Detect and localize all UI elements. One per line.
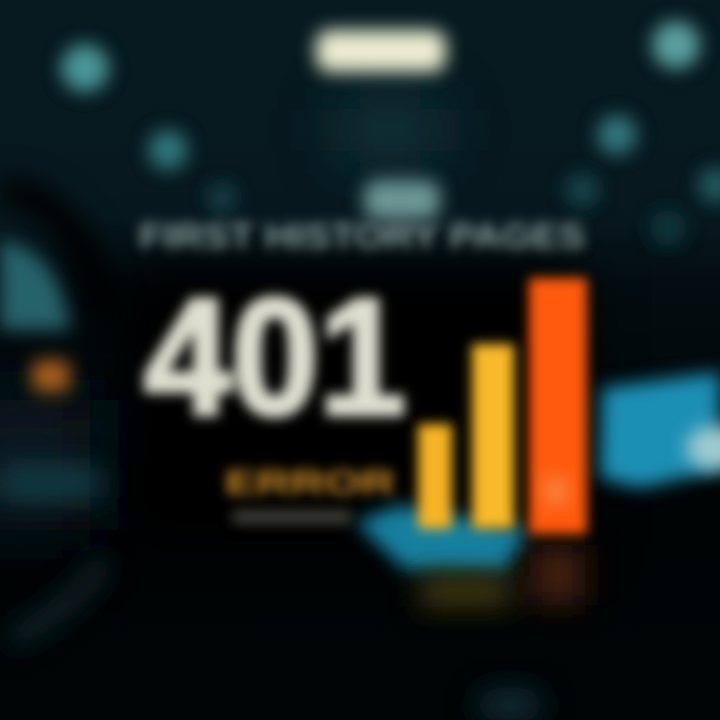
top lights xyxy=(61,21,720,246)
blue shape: right xyxy=(600,372,720,488)
bottom glow xyxy=(475,687,545,720)
light: centre glow xyxy=(364,180,440,220)
light: top centre bar xyxy=(316,30,446,72)
bar: tall orange xyxy=(529,278,587,534)
bar: medium yellow xyxy=(472,344,514,529)
light: top left dot xyxy=(61,44,109,92)
reflection under bars xyxy=(420,545,585,607)
background glow xyxy=(0,105,580,545)
light: right low dot xyxy=(650,210,686,246)
light: upper right dot xyxy=(597,115,637,155)
bar: small yellow xyxy=(418,424,452,529)
left panel lines xyxy=(0,468,105,640)
light: upper left dot xyxy=(148,130,188,170)
heading: FIRST HISTORY PAGES xyxy=(139,217,585,256)
highlight on right blue shape xyxy=(686,426,720,470)
light: top right dot xyxy=(652,21,700,69)
left gauge arc xyxy=(0,240,70,330)
bar highlight xyxy=(546,478,566,504)
light: small dot near heading xyxy=(207,183,237,213)
bar chart xyxy=(418,278,587,534)
light: small right dot xyxy=(565,173,599,207)
yellow caption: ERROR xyxy=(225,464,395,502)
grey caption xyxy=(232,510,352,524)
dark left arc xyxy=(0,190,105,320)
orange indicator xyxy=(32,360,70,392)
blue shape: below bars xyxy=(355,505,530,572)
light: far right dot xyxy=(698,167,720,203)
big number 401: 401 xyxy=(144,265,406,450)
